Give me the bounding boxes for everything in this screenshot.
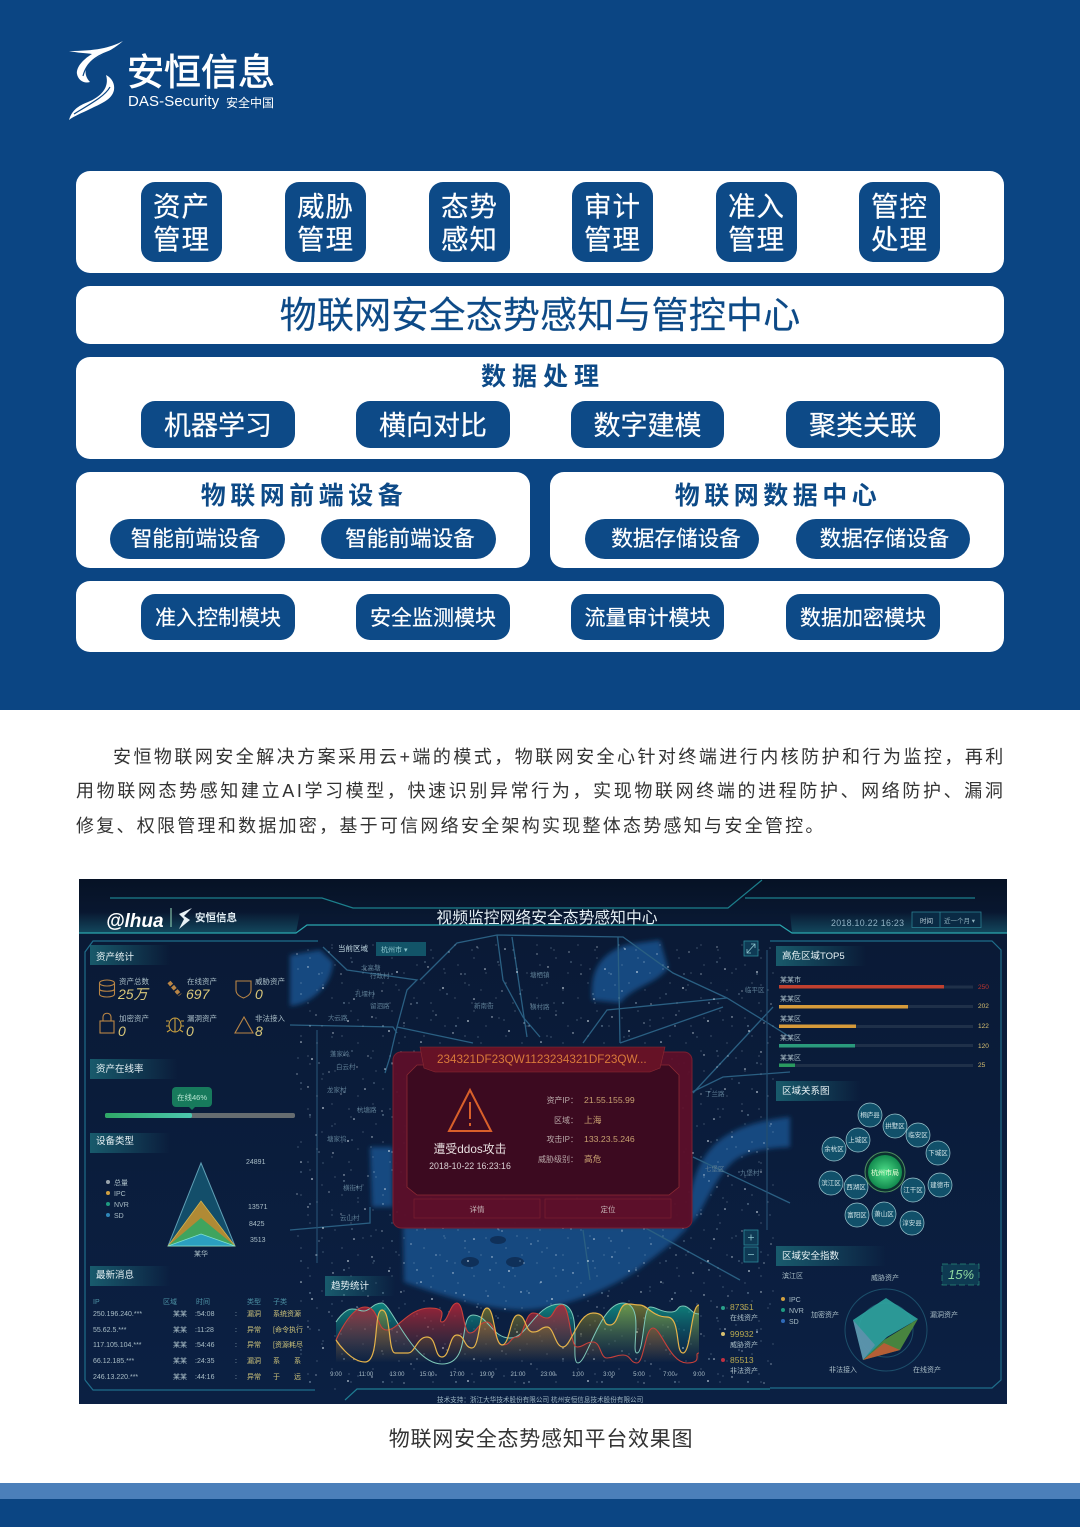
button: machine learning: 机器学习: [164, 410, 272, 440]
button: access management: 准入: [728, 191, 785, 222]
panel: latest messages: 系 系: [273, 1356, 301, 1365]
button: storage device 2: 数据存储设备: [820, 526, 949, 551]
chart: trend statistics: 1:00: [572, 1372, 584, 1378]
alert dialog: 详情: [470, 1204, 485, 1214]
panel: latest messages: 246.13.220.***: [93, 1374, 138, 1381]
panel: latest messages: 类型: [247, 1297, 261, 1306]
icon: database: [100, 980, 114, 997]
map: water and roads: 杭塘路: [357, 1105, 377, 1114]
button: audit management: [572, 182, 653, 262]
map: water and roads: 九堡村: [740, 1168, 760, 1177]
button: horizontal comparison: 横向对比: [379, 410, 487, 440]
icon: lock: [100, 1013, 114, 1033]
icon: link: [169, 982, 180, 995]
panel: latest messages: :24:35: [195, 1358, 215, 1365]
alert dialog: 高危: [584, 1153, 602, 1164]
alert dialog: [393, 1047, 692, 1228]
button: control handling: [859, 182, 940, 262]
logo: DAS-Security: DAS-Security: [128, 93, 219, 110]
logo: DAS-Security: 安全中国: [226, 96, 274, 110]
panel: device types: 总量: [114, 1178, 128, 1187]
caption: 物联网安全态势感知平台效果图: [389, 1428, 693, 1451]
legend and map statistics: [721, 1297, 804, 1375]
panel: high risk TOP5: [776, 946, 989, 1069]
icon: shield: [236, 981, 251, 998]
chart: trend statistics: 5:00: [633, 1372, 645, 1378]
button: clustering: [786, 401, 940, 448]
button: front-end device 1: 智能前端设备: [131, 526, 260, 551]
chart: trend statistics: 3:00: [603, 1372, 615, 1378]
panel: latest messages: 区域: [163, 1297, 177, 1306]
panel: center title: [76, 286, 1004, 344]
panel: region security index: 区域安全指数: [782, 1250, 840, 1262]
panel: latest messages: 系统资源: [273, 1309, 301, 1318]
panel: region relation chart: 萧山区: [874, 1209, 894, 1218]
alert dialog: 区域：: [554, 1115, 578, 1125]
panel: high risk TOP5: 25: [978, 1062, 986, 1069]
legend and map statistics: NVR: [789, 1308, 804, 1315]
dashboard title: 视频监控网络安全态势感知中心: [436, 908, 658, 927]
panel: region relation chart: 临安区: [908, 1130, 928, 1139]
text block: intro paragraph: 安恒物联网安全解决方案采用云+端的模式，物联网安全心针对终端进行内核防护和行为监控，再利: [113, 747, 1006, 767]
heading: data processing: 数据处理: [481, 363, 605, 391]
panel: latest messages: 漏洞: [247, 1356, 261, 1365]
panel: device types: 某华: [194, 1249, 208, 1258]
button: access management: 管理: [728, 224, 785, 255]
panel: region relation chart: 下城区: [928, 1149, 948, 1157]
panel: high risk TOP5: 某某区: [780, 1034, 801, 1042]
panel: latest messages: 250.196.240.***: [93, 1311, 142, 1318]
button: data encryption module: [786, 594, 940, 640]
panel: modules: [76, 581, 1004, 652]
alert dialog: 攻击IP：: [546, 1134, 578, 1144]
chart: trend statistics: 23:00: [540, 1372, 556, 1378]
button: threat management: [285, 182, 366, 262]
map: water and roads: 丁兰路: [705, 1089, 725, 1098]
panel: high risk TOP5: 某某区: [780, 1015, 801, 1023]
panel: latest messages: [命令执行: [273, 1325, 303, 1334]
panel: device types: 24891: [246, 1159, 266, 1166]
button: security monitoring module: 安全监测模块: [370, 607, 496, 630]
panel: region relation chart: 拱墅区: [885, 1121, 905, 1130]
logo: DAS-Security: 安恒信息: [127, 52, 275, 93]
panel: high risk TOP5: 250: [978, 984, 989, 991]
panel: center title: 物联网安全态势感知与管控中心: [280, 294, 800, 336]
chart: trend statistics: 9:00: [330, 1372, 342, 1378]
heading: IoT front-end devices: 物联网前端设备: [201, 482, 407, 510]
panel: latest messages: 55.62.5.***: [93, 1327, 127, 1334]
panel: region relation chart: 淳安县: [902, 1218, 922, 1227]
button: asset management: 管理: [153, 224, 210, 255]
panel: high risk TOP5: 某某区: [780, 1054, 801, 1062]
panel: asset statistics: 资产统计: [96, 951, 135, 963]
panel: region relation chart: 桐庐县: [860, 1110, 880, 1119]
panel: region security index: 在线资产: [913, 1365, 941, 1374]
chart: trend statistics: 21:00: [510, 1372, 526, 1378]
panel: latest messages: 时间: [196, 1297, 210, 1306]
frame lines: [79, 880, 1007, 1400]
panel: asset statistics: 697: [186, 986, 211, 1002]
text block: intro paragraph: 修复、权限管理和数据加密，基于可信网络安全架构实现整体态势感知与安全管控。: [76, 816, 826, 836]
panel: latest messages: 66.12.185.***: [93, 1358, 135, 1365]
panel: latest messages: 异常: [247, 1340, 261, 1349]
button: front-end device 1: [110, 519, 285, 559]
panel: high risk TOP5: 某某市: [780, 975, 801, 984]
button: audit management: 管理: [584, 224, 641, 255]
alert dialog: 2018-10-22 16:23:16: [429, 1161, 511, 1171]
map: water and roads: [290, 935, 790, 1390]
panel: region relation chart: 建德市: [930, 1180, 950, 1189]
button: asset management: [141, 182, 222, 262]
footer band: [0, 1483, 1080, 1527]
panel: asset statistics: 在线资产: [187, 976, 217, 986]
button: horizontal comparison: [356, 401, 510, 448]
legend and map statistics: 99932: [730, 1329, 754, 1339]
panel: latest messages: :: [235, 1327, 237, 1334]
button: control handling: 处理: [871, 224, 928, 255]
panel: region security index: 非法接入: [829, 1365, 857, 1374]
panel: latest messages: :: [235, 1342, 237, 1349]
map: water and roads: 孔堰村: [355, 989, 375, 998]
button: traffic audit module: [571, 594, 724, 640]
panel: online rate: 资产在线率: [96, 1063, 144, 1075]
panel: region relation chart: 余杭区: [824, 1144, 844, 1153]
panel: region security index: 威胁资产: [871, 1273, 899, 1282]
text block: intro paragraph: [76, 747, 1006, 836]
button: front-end device 2: 智能前端设备: [345, 526, 475, 551]
date and time filter: 近一个月 ▾: [944, 916, 976, 925]
panel: asset statistics: [90, 945, 285, 1039]
map: water and roads: 塘家坞: [327, 1134, 347, 1143]
button: control handling: 管控: [871, 191, 928, 222]
panel: asset statistics: 资产总数: [119, 976, 149, 986]
chart: trend statistics: 15:00: [419, 1372, 435, 1378]
map: water and roads: 临平区: [745, 985, 765, 994]
legend and map statistics: 威胁资产: [730, 1340, 758, 1349]
button: traffic audit module: 流量审计模块: [584, 607, 710, 630]
panel: IoT front-end devices: [76, 472, 530, 568]
panel: IoT data center: [550, 472, 1004, 568]
chart: trend statistics: 11:00: [359, 1372, 374, 1378]
panel: device types: SD: [114, 1213, 124, 1220]
panel: latest messages: 漏洞: [247, 1309, 261, 1318]
panel: latest messages: IP: [93, 1299, 100, 1306]
footer credit: 技术支持：浙江大华技术股份有限公司 杭州安恒信息技术股份有限公司: [437, 1395, 643, 1404]
panel: asset statistics: 0: [255, 986, 263, 1002]
panel: latest messages: :: [235, 1311, 237, 1318]
panel: device types: NVR: [114, 1202, 129, 1209]
panel: region security index: [776, 1246, 979, 1374]
dashboard background: [79, 879, 1007, 1404]
panel: asset statistics: 漏洞资产: [187, 1013, 217, 1023]
panel: online rate: [90, 1059, 295, 1118]
button: storage device 2: [796, 519, 970, 559]
legend and map statistics: 非法资产: [730, 1366, 758, 1375]
chart: trend statistics: 9:00: [693, 1372, 705, 1378]
button: asset management: 资产: [153, 191, 210, 222]
button: situational awareness: 感知: [441, 224, 498, 255]
panel: asset statistics: 加密资产: [119, 1013, 149, 1023]
panel: high risk TOP5: 122: [978, 1023, 989, 1030]
panel: region relation chart: 杭州市局: [871, 1168, 899, 1177]
panel: asset statistics: 8: [255, 1023, 263, 1039]
chart: trend statistics: 19:00: [479, 1372, 495, 1378]
panel: management functions: [76, 171, 1004, 273]
panel: region relation chart: 上城区: [848, 1135, 868, 1144]
alert dialog: 资产IP：: [546, 1095, 578, 1105]
map: water and roads: 白云村: [336, 1062, 356, 1071]
panel: region security index: 滨江区: [782, 1271, 803, 1280]
panel: latest messages: :54:46: [195, 1342, 215, 1349]
panel: latest messages: :11:28: [195, 1327, 214, 1334]
panel: region relation chart: [776, 1081, 952, 1235]
panel: asset statistics: 0: [118, 1023, 126, 1039]
panel: latest messages: 异常: [247, 1372, 261, 1381]
panel: latest messages: 子类: [273, 1297, 287, 1306]
panel: latest messages: :: [235, 1358, 237, 1365]
panel: high risk TOP5: 高危区域TOP5: [782, 950, 845, 962]
button: situational awareness: [429, 182, 510, 262]
legend and map statistics: 87351: [730, 1302, 754, 1312]
button: access control module: [141, 594, 295, 640]
button: security monitoring module: [356, 594, 510, 640]
alert dialog: 定位: [600, 1204, 616, 1214]
button: storage device 1: [585, 519, 759, 559]
button: access control module: 准入控制模块: [155, 607, 281, 630]
panel: region security index: 加密资产: [811, 1310, 839, 1319]
alert dialog: 234321DF23QW1123234321DF23QW...: [437, 1053, 647, 1066]
dashboard logos: [106, 908, 237, 932]
icon: bug: [166, 1018, 184, 1032]
panel: high risk TOP5: 某某区: [780, 995, 801, 1003]
panel: latest messages: 于 远: [273, 1373, 301, 1381]
region selector: 杭州市 ▾: [381, 945, 408, 954]
panel: latest messages: 117.105.104.***: [93, 1342, 142, 1349]
dashboard logos: 安恒信息: [195, 911, 237, 924]
panel: data processing: [76, 357, 1004, 459]
top navy background: [0, 0, 1080, 710]
button: threat management: 管理: [297, 224, 354, 255]
panel: latest messages: :54:08: [195, 1311, 215, 1318]
panel: latest messages: 某某: [173, 1373, 187, 1381]
panel: latest messages: 某某: [173, 1357, 187, 1365]
chart: trend statistics: 趋势统计: [331, 1280, 370, 1292]
panel: region relation chart: 富阳区: [847, 1210, 867, 1219]
map: water and roads: 龙家村: [327, 1085, 347, 1094]
region selector: 当前区域: [338, 943, 368, 953]
alert dialog: 威胁级别：: [538, 1154, 578, 1164]
alert dialog: 21.55.155.99: [584, 1095, 635, 1105]
alert dialog: 133.23.5.246: [584, 1134, 635, 1144]
button: access management: [716, 182, 797, 262]
panel: online rate: 在线46%: [177, 1092, 207, 1102]
map: water and roads: 北高塘: [361, 963, 381, 972]
map: water and roads: 七堡区: [705, 1164, 725, 1173]
panel: latest messages: 某某: [173, 1341, 187, 1349]
panel: latest messages: 某某: [173, 1326, 187, 1334]
panel: latest messages: [90, 1266, 303, 1381]
header glow: [79, 912, 1007, 933]
panel: region relation chart: 江干区: [903, 1186, 923, 1194]
panel: latest messages: :44:16: [195, 1374, 215, 1381]
legend and map statistics: 85513: [730, 1355, 754, 1365]
logo: DAS-Security: [69, 41, 275, 120]
button: clustering: 聚类关联: [809, 410, 917, 440]
panel: asset statistics: 非法接入: [255, 1013, 285, 1023]
date and time filter: 时间: [920, 916, 933, 925]
map controls: [744, 941, 758, 1262]
panel: device types: 8425: [249, 1221, 265, 1228]
legend and map statistics: SD: [789, 1319, 799, 1326]
map: water and roads: 横街村: [343, 1183, 363, 1192]
button: machine learning: [141, 401, 295, 448]
panel: device types: [90, 1133, 268, 1258]
date and time filter: 2018.10.22 16:23: [831, 918, 904, 928]
panel: region relation chart: 区域关系图: [782, 1085, 830, 1097]
chart: trend statistics: 17:00: [449, 1372, 465, 1378]
panel: region security index: 15%: [948, 1267, 974, 1282]
chart: trend statistics: [325, 1276, 705, 1378]
map: water and roads: 新南街: [474, 1001, 494, 1010]
button: audit management: 审计: [584, 191, 641, 222]
panel: device types: 3513: [250, 1237, 266, 1244]
map: water and roads: 留泗路: [370, 1001, 390, 1010]
date and time filter: [831, 912, 981, 928]
map: water and roads: 横村路: [530, 1002, 550, 1011]
map: water and roads: 蓬家岭: [330, 1049, 350, 1058]
button: digital modeling: [571, 401, 724, 448]
dashboard screenshot: [79, 879, 1007, 1404]
heading: IoT data center: 物联网数据中心: [675, 482, 881, 510]
panel: region relation chart: 滨江区: [821, 1178, 841, 1187]
dashboard logos: @lhua: [106, 911, 164, 932]
icon: warning: [235, 1017, 253, 1033]
panel: region security index: 漏洞资产: [930, 1310, 958, 1319]
panel: latest messages: :: [235, 1374, 237, 1381]
panel: device types: IPC: [114, 1191, 126, 1198]
map: water and roads: 大云路: [328, 1013, 348, 1022]
panel: asset statistics: 0: [186, 1023, 194, 1039]
map: water and roads: 塘栖镇: [530, 970, 550, 979]
alert dialog: 上海: [584, 1114, 602, 1125]
alert dialog: 遭受ddos攻击: [434, 1142, 507, 1156]
chart: trend statistics: 7:00: [663, 1372, 675, 1378]
map: water and roads: 云山村: [340, 1213, 360, 1222]
button: situational awareness: 态势: [441, 191, 498, 222]
chart: trend statistics: 13:00: [389, 1372, 405, 1378]
panel: latest messages: 某某: [173, 1310, 187, 1318]
panel: device types: 设备类型: [96, 1135, 135, 1147]
button: threat management: 威胁: [297, 191, 354, 222]
button: data encryption module: 数据加密模块: [800, 607, 926, 630]
legend and map statistics: 在线资产: [730, 1313, 758, 1322]
panel: latest messages: [资源耗尽: [273, 1340, 303, 1349]
panel: high risk TOP5: 202: [978, 1003, 989, 1010]
panel: high risk TOP5: 120: [978, 1043, 989, 1050]
panel: asset statistics: 威胁资产: [255, 976, 285, 986]
button: digital modeling: 数字建模: [594, 410, 702, 440]
legend and map statistics: IPC: [789, 1297, 801, 1304]
region selector: [338, 942, 426, 956]
panel: asset statistics: 25万: [117, 986, 150, 1002]
panel: latest messages: 最新消息: [96, 1269, 134, 1281]
panel: region relation chart: 西湖区: [846, 1182, 866, 1191]
button: storage device 1: 数据存储设备: [611, 526, 741, 551]
button: front-end device 2: [321, 519, 496, 559]
text block: intro paragraph: 用物联网态势感知建立AI学习模型，快速识别异常行为，实现物联网终端的进程防护、网络防护、漏洞: [76, 781, 1006, 801]
panel: device types: 13571: [248, 1204, 268, 1211]
panel: latest messages: 异常: [247, 1325, 261, 1334]
map: water and roads: 行政村: [370, 971, 390, 980]
